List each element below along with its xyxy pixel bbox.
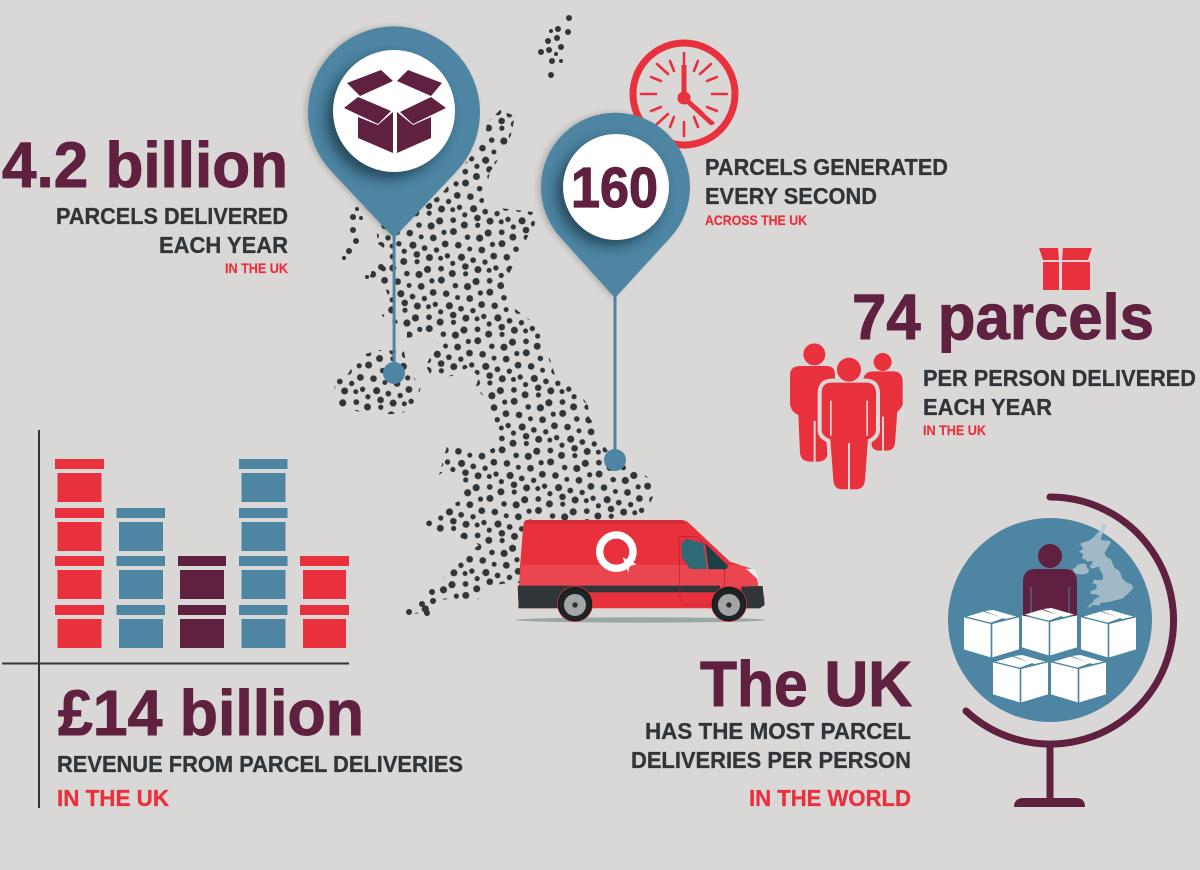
van body [518,520,764,608]
stat: 4.2 billion: EACH YEAR [159,232,288,258]
wheels [557,586,747,622]
light side band [519,565,758,587]
globe arc and stand [966,497,1174,744]
pin line [614,296,616,451]
side window [682,539,707,569]
pin end dot [604,449,626,471]
column 5 red [300,556,349,648]
open box icon [344,70,446,153]
ground shadow [516,617,766,623]
pin shadow [326,57,448,179]
white disc [563,134,669,240]
stat: The UK [631,648,912,811]
clock icon [633,43,735,145]
globe icon [948,497,1174,807]
right map pin with 160 [538,113,690,471]
dotted map of the UK [325,15,665,625]
left map pin with box icon [305,26,480,384]
column 4 teal [239,459,288,648]
stat: 4.2 billion: PARCELS DELIVERED [56,203,288,229]
person [1023,544,1077,616]
pin body [308,26,480,238]
stat: The UK: HAS THE MOST PARCEL [645,718,911,744]
parcel boxes [964,608,1136,702]
pin outer shadow [305,26,477,238]
stat: 14 billion revenue: IN THE UK [57,785,169,811]
stat: 160 parcels every second [705,154,948,228]
stat: 4.2 billion: 4.2 billion [2,129,288,201]
mini UK map [1073,524,1133,607]
roof shade [524,520,689,524]
delivery van [516,520,766,623]
bar chart of parcel stacks [2,430,349,808]
globe disc [948,518,1152,722]
stat: The UK: DELIVERIES PER PERSON [631,747,911,773]
column 3 maroon [178,556,226,648]
number 160: 160 [571,156,658,220]
stat: 74 parcels: 74 parcels [852,281,1154,353]
stat: 14 billion revenue: £14 billion [58,677,364,749]
door lines [679,537,725,605]
stat: 160 parcels every second: EVERY SECOND [705,183,877,209]
axes [2,430,349,808]
icon: gift box [1039,248,1092,290]
headlight [746,569,759,580]
Q logo [600,535,637,573]
stat: 14 billion revenue: REVENUE FROM PARCEL DELIVERIES [57,751,463,777]
pin body [541,113,690,298]
icon: group of people [790,343,903,489]
stat: 4.2 billion [2,129,288,276]
pin shadow [557,140,663,246]
pin outer shadow [538,113,687,298]
pin line [393,236,396,372]
front window [705,543,728,569]
stat: 74 parcels [852,281,1196,438]
stat: The UK: IN THE WORLD [749,785,911,811]
column 2 teal [116,508,165,648]
white disc [333,50,455,172]
stat: 14 billion revenue [57,677,463,811]
dark lower trim [518,586,563,608]
column 1 red [55,459,104,648]
stat: The UK: The UK [700,648,912,720]
pin end dot [383,362,405,384]
stat: 74 parcels: IN THE UK [923,422,986,438]
stat: 160 parcels every second: PARCELS GENERATED [705,154,948,180]
stat: 4.2 billion: IN THE UK [225,260,288,276]
stat: 160 parcels every second: ACROSS THE UK [705,212,807,228]
stat: 74 parcels: EACH YEAR [923,394,1052,420]
